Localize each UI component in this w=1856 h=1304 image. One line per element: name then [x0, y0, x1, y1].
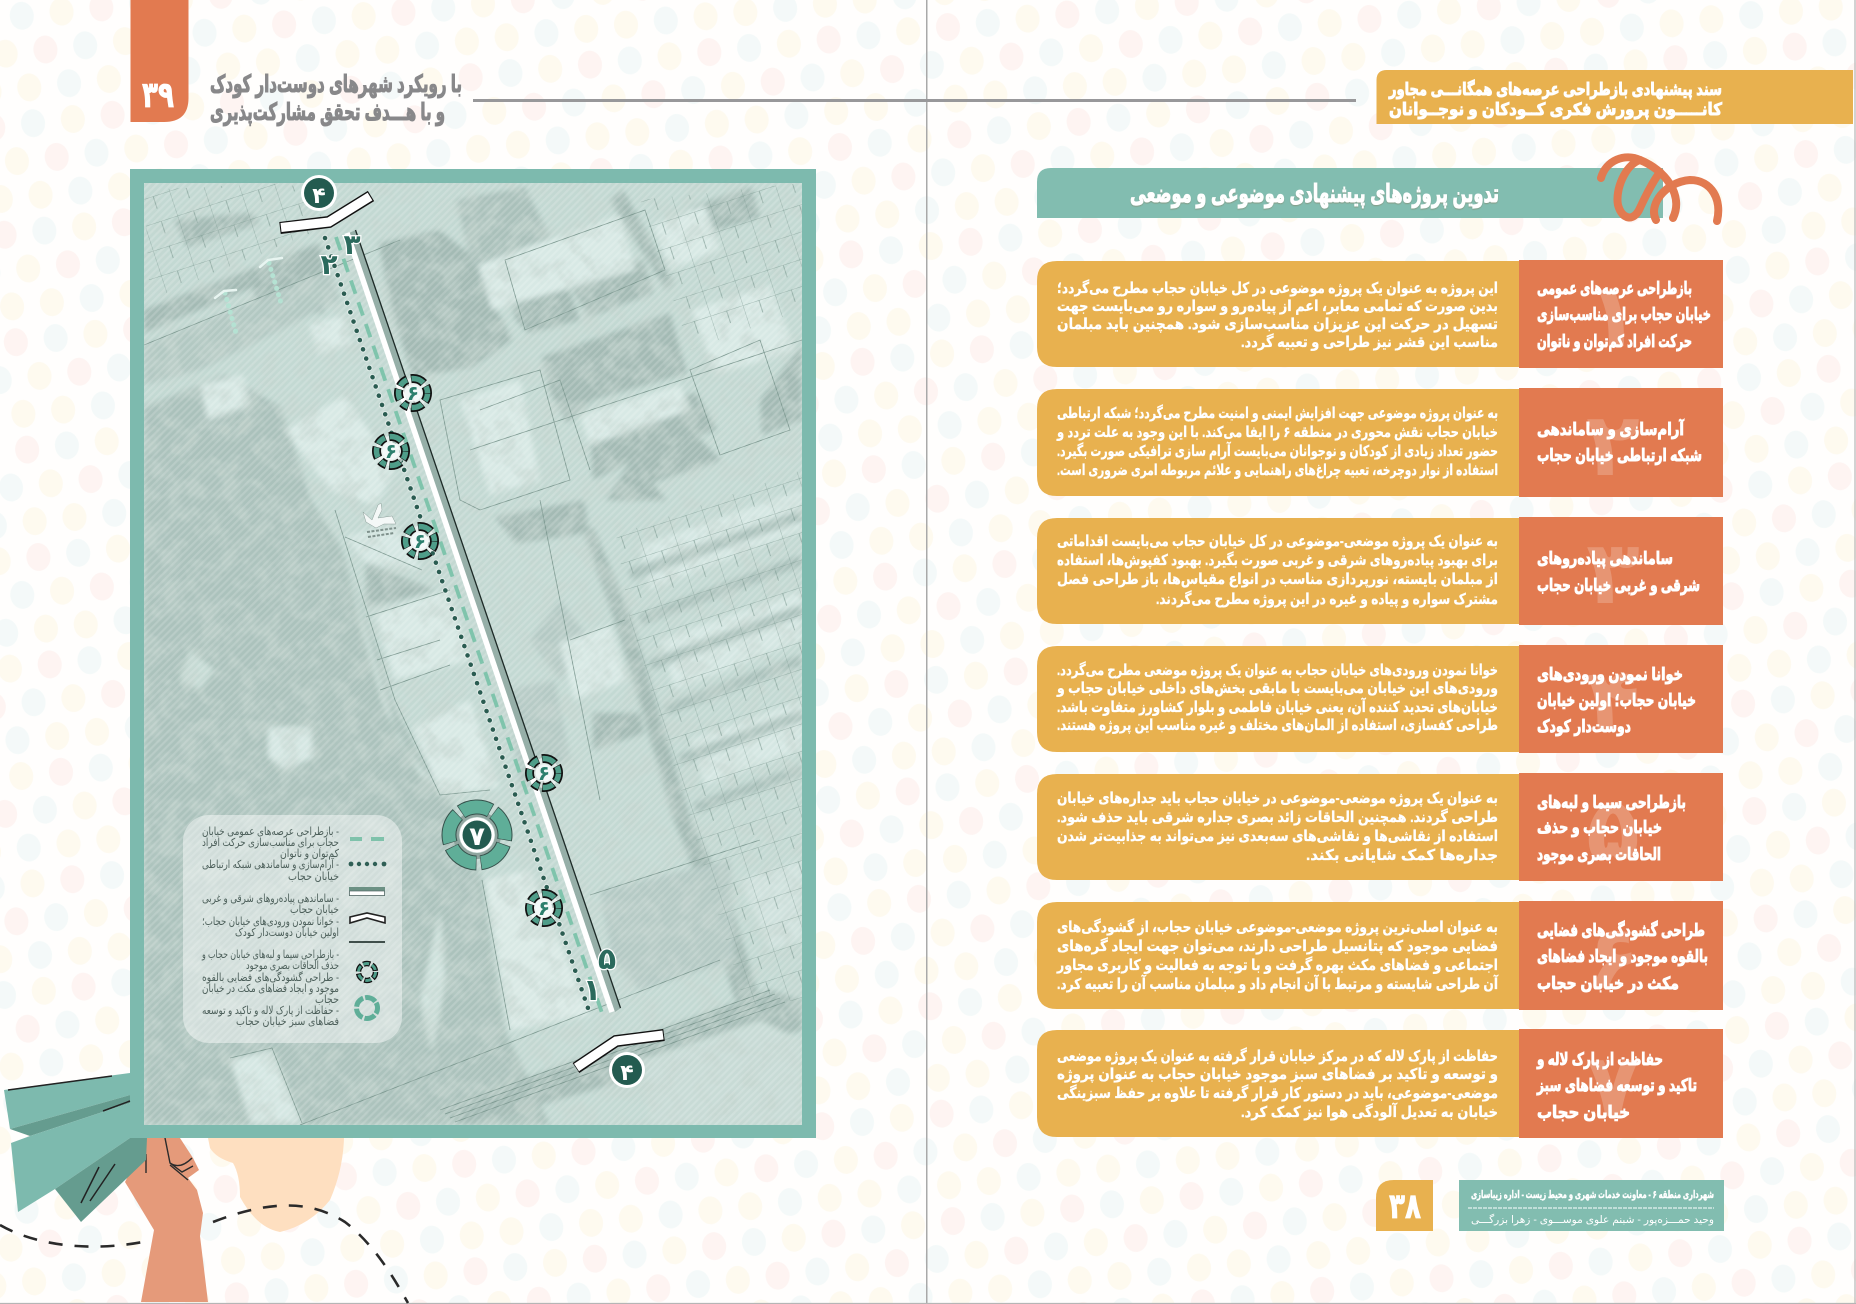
legend symbol: small ring — [358, 964, 376, 980]
right page number box — [1376, 1180, 1433, 1231]
map: marker 4 top — [301, 175, 337, 211]
card 5 title: بازطراحی سیما و لبه‌های — [1537, 793, 1686, 813]
legend symbol: sidewalk band — [349, 887, 385, 896]
map: light blocks — [310, 317, 351, 352]
legend symbol: large ring — [353, 994, 381, 1022]
legend text: فضاهای سبز خیابان حجاب — [236, 1016, 339, 1028]
card 4 description: خیابان‌های تحدید کننده آن، یعنی خیابان فاطمی و بلوار کشاورز متفاوت باشد. — [1057, 698, 1498, 716]
card 6 description: فضایی موجود که پتانسیل طراحی دارند، می‌توان جهت ایجاد گره‌های — [1057, 937, 1498, 956]
map: open-space node 6a — [398, 378, 428, 408]
card 3 description: به عنوان یک پروژه موضعی-موضوعی در کل خیابان حجاب می‌بایست اقداماتی — [1057, 533, 1498, 551]
footer credits box — [1459, 1180, 1724, 1231]
map: open-space node 6d: ۶ — [538, 763, 550, 785]
card 3 description — [1057, 533, 1498, 609]
legend text: - بازطراحی سیما و لبه‌های خیابان حجاب و — [201, 949, 339, 961]
card 3 description: مشترک سواره و پیاده و غیره در این پروژه مطرح می‌گردند. — [1156, 590, 1498, 609]
horizontal header rule — [473, 99, 1356, 102]
card 3 — [1037, 517, 1723, 625]
map: marker 4 bottom — [609, 1052, 645, 1088]
legend text: حذف الحاقات بصری موجود — [246, 960, 339, 972]
top right gold banner: سند پیشنهادی بازطراحی عرصه‌های همگانـــی مجاور — [1388, 79, 1722, 100]
card 3 title: شرقی و غربی خیابان حجاب — [1537, 576, 1700, 596]
card 7 title: حفاظت از پارک لاله و — [1536, 1050, 1663, 1070]
left page heading: با رویکرد شهرهای دوست‌دار کودک — [210, 71, 462, 98]
left page heading — [210, 71, 462, 126]
illustration: hand — [125, 1138, 208, 1302]
card 1 description — [1057, 279, 1498, 351]
card 7 title — [1536, 1050, 1697, 1122]
card 2 description: به عنوان پروژه موضوعی جهت افزایش ایمنی و امنیت مطرح می‌گردد؛ شبکه ارتباطی — [1057, 404, 1498, 423]
card 6 title — [1537, 920, 1708, 993]
map: open-space node 6e: ۶ — [538, 898, 550, 920]
top right gold banner — [1376, 70, 1853, 124]
illustration: dashed flight path — [0, 1206, 408, 1303]
card 6 description: آن طراحی شایسته و مرتبط با آن انجام داد و مبلمان مناسب آن را تعبیه کرد. — [1057, 975, 1499, 993]
card 4 title: خوانا نمودن ورودی‌های — [1537, 665, 1683, 685]
map: central strip — [495, 500, 589, 543]
card 1 description: مناسب این قشر نیز طراحی و تعبیه گردد. — [1241, 333, 1498, 351]
card 6 title: بالقوه موجود و ایجاد فضاهای — [1537, 947, 1708, 967]
legend symbol: black line — [349, 941, 385, 943]
map: open-space node 6b: ۶ — [385, 441, 397, 463]
card 7: ۷ — [1586, 1036, 1640, 1135]
card 1 description: این پروژه به عنوان یک پروژه موضوعی در کل خیابان حجاب مطرح می‌گردد؛ — [1057, 279, 1498, 298]
card 1 title: خیابان حجاب برای مناسب‌سازی — [1537, 305, 1711, 325]
map: open-space node 6b — [376, 436, 406, 466]
right page number box: ۳۸ — [1389, 1187, 1421, 1226]
map: open-space node 6c: ۶ — [414, 531, 426, 553]
card 5 description: جداره‌ها کمک شایانی بکند. — [1306, 847, 1498, 864]
legend text: - ساماندهی پیاده‌روهای شرقی و غربی — [202, 893, 339, 905]
map: aerial base — [144, 183, 802, 1125]
card 7 — [1037, 1029, 1723, 1138]
card 5 title — [1537, 793, 1686, 865]
card 1 title — [1537, 279, 1711, 352]
legend text: موجود و ایجاد فضاهای مکث در خیابان — [202, 983, 339, 995]
card 7 description: حفاظت از پارک لاله که در مرکز خیابان قرار گرفته به عنوان یک پروژه موضعی — [1057, 1047, 1498, 1066]
legend text — [201, 826, 340, 1028]
map: open-space node 6c — [405, 526, 435, 556]
map: sidewalk band — [349, 230, 621, 1012]
map: open-space node 6e — [529, 893, 559, 923]
left page heading: و با هـــدف تحقق مشارکت‌پذیری — [210, 99, 445, 126]
left page number tab — [130, 0, 188, 122]
map: teal dashed route 1 — [336, 237, 602, 1013]
card 4 description: خوانا نمودن ورودی‌های خیابان حجاب به عنوان یک پروژه موضعی مطرح می‌گردد. — [1057, 661, 1498, 680]
map: labels on routes: ۲ — [320, 249, 338, 280]
map: bottom entrance chevron — [576, 1035, 664, 1068]
map: park node 7 — [438, 796, 516, 874]
card 7 title: خیابان حجاب — [1537, 1103, 1630, 1122]
card 6 title: طراحی گشودگی‌های فضایی — [1537, 920, 1705, 941]
card 5 title: الحاقات بصری موجود — [1537, 845, 1661, 865]
card 2: ۲ — [1586, 395, 1640, 494]
card 3 description: برای بهبود پیاده‌روهای شرقی و غربی صورت بگیرد. بهبود کفپوش‌ها، استفاده — [1057, 551, 1498, 570]
illustration: face shape — [208, 1138, 344, 1232]
map: labels on routes: ۳ — [343, 229, 361, 260]
legend text: حجاب — [315, 994, 339, 1006]
card 2 — [1037, 388, 1723, 497]
card 4 description: طراحی کفسازی، استفاده از المان‌های مختلف و غیره مناسب این پروژه هستند. — [1057, 717, 1498, 735]
map: east black edge line — [356, 230, 620, 1008]
map: park node 7: ۷ — [469, 821, 485, 851]
section title bar: تدوین پروژه‌های پیشنهادی موضوعی و موضعی — [1130, 180, 1499, 209]
map: white sidewalk strip — [347, 233, 612, 1012]
map: open-space node 6a: ۶ — [407, 383, 419, 405]
map: west park mid-tone — [144, 440, 550, 1125]
card 4 — [1037, 645, 1723, 753]
card 6: ۶ — [1586, 908, 1640, 1007]
map: marker 4 top: ۴ — [312, 183, 326, 208]
card 7 description — [1057, 1047, 1498, 1121]
legend text: - آرام‌سازی و ساماندهی شبکه ارتباطی — [202, 857, 339, 871]
legend text: - بازطراحی عرصه‌های عمومی خیابان — [202, 826, 339, 838]
legend symbol: dashed line — [350, 837, 384, 841]
card 5 description — [1057, 790, 1498, 864]
map: dotted route 2 — [325, 238, 590, 1014]
card 6 description: به عنوان اصلی‌ترین پروژه موضعی-موضوعی خیابان حجاب، از گشودگی‌های — [1057, 918, 1498, 937]
card 1 description: تسهیل در حرکت این عزیزان مناسب‌سازی شود. همچنین باید مبلمان — [1057, 316, 1498, 334]
card 2 title: آرام‌سازی و ساماندهی — [1537, 418, 1685, 440]
card 1 title: حرکت افراد کم‌توان و ناتوان — [1537, 332, 1692, 352]
top right gold banner: کانـــــون پرورش فکری کــودکان و نوجــوانان — [1389, 100, 1722, 120]
card 3 title — [1537, 549, 1700, 596]
map: south-east — [631, 913, 713, 980]
card 6 description: اجتماعی و فضاهای مکث بهره گرفت و با توجه به فعالیت و کاربری مجاور — [1056, 956, 1498, 974]
footer credits box: شهرداری منطقه ۶ - معاونت خدمات شهری و محیط زیست - اداره زیباسازی — [1471, 1189, 1714, 1201]
left page number tab: ۳۹ — [142, 74, 174, 115]
card 2 title — [1537, 418, 1702, 465]
legend text: خیابان حجاب — [288, 871, 339, 883]
card 5: ۵ — [1586, 779, 1640, 878]
card 7 title: تاکید و توسعه فضاهای سبز — [1536, 1076, 1697, 1096]
map: labels on routes: ۱ — [583, 974, 601, 1007]
card 2 description — [1056, 404, 1498, 480]
page fold divider — [926, 0, 928, 1304]
map: hatching — [144, 183, 802, 1125]
legend text: - خوانا نمودن ورودی‌های خیابان حجاب؛ — [202, 916, 339, 928]
map: mottled texture — [144, 183, 802, 1125]
map: pale dotted markers — [215, 258, 282, 333]
card 5 description: به عنوان یک پروژه موضعی-موضوعی در خیابان حجاب باید جداره‌های خیابان — [1057, 790, 1498, 808]
map frame — [130, 169, 816, 1138]
card 4 description: ورودی‌های این خیابان می‌بایست با مابقی بخش‌های داخلی خیابان حجاب و — [1056, 680, 1498, 697]
icon: orange squiggle — [1601, 157, 1718, 221]
card 5 description: طراحی گردند. همچنین الحاقات زائد بصری جداره شرقی باید حذف شود. — [1057, 808, 1498, 827]
map: labels on routes: ۵ — [598, 943, 616, 976]
card 2 description: حضور تعداد زیادی از کودکان و نوجوانان می‌بایست آرام سازی ترافیکی صورت بگیرد. — [1057, 442, 1498, 460]
card 6 — [1037, 901, 1723, 1010]
map: tonal areas — [144, 187, 802, 1125]
section title bar — [1037, 168, 1663, 218]
card 3: ۳ — [1586, 523, 1640, 622]
card 7 description: خیابان به تعدیل آلودگی هوا نیز کمک کرد. — [1241, 1103, 1498, 1121]
map: parcel grids — [616, 470, 802, 1005]
card 5 description: استفاده از نقاشی‌ها و نقاشی‌های سه‌بعدی نیز می‌تواند به جذابیت‌تر شدن — [1057, 828, 1498, 845]
card 4: ۴ — [1586, 651, 1640, 750]
map: open-space node 6d — [529, 758, 559, 788]
footer credits box: وحید حمـــزه‌پور - شبنم علوی موســـوی - زهرا بزرگـــی — [1471, 1213, 1714, 1226]
card 4 title: خیابان حجاب؛ اولین خیابان — [1537, 691, 1696, 711]
legend symbol: entrance chevron — [350, 913, 385, 923]
legend symbol: dots — [349, 862, 386, 866]
card 2 description: خیابان حجاب نقش محوری در منطقه ۶ را ایفا می‌کند. با این وجود به علت تردد و — [1056, 424, 1498, 441]
map: marker 4 bottom: ۴ — [620, 1060, 634, 1085]
map: thin parcel lines — [144, 210, 802, 1125]
map: top entrance chevron — [280, 196, 371, 228]
map: organisation logo — [363, 503, 396, 537]
legend text: کم‌توان و ناتوان — [280, 848, 340, 860]
card 4 description — [1056, 661, 1498, 735]
card 2 description: استفاده از نوار دوچرخه، تعبیه چراغ‌های راهنمایی و علائم مربوطه امری ضروری است. — [1057, 462, 1498, 480]
card 6 description — [1056, 918, 1499, 993]
card 1 — [1037, 260, 1723, 368]
card 5 title: خیابان حجاب و حذف — [1537, 818, 1662, 838]
card 4 title: دوست‌دار کودک — [1537, 717, 1631, 737]
legend text: اولین خیابان دوست‌دار کودک — [235, 927, 339, 939]
legend text: - طراحی گشودگی‌های فضایی بالقوه — [202, 971, 339, 984]
card 1 description: بدین صورت که تمامی معابر، اعم از پیاده‌رو و سواره رو می‌بایست جهت — [1057, 298, 1498, 316]
card 7 description: و توسعه و تاکید بر فضاهای سبز موجود خیابان حجاب به عنوان پروژه — [1057, 1066, 1498, 1084]
card 1 title: بازطراحی عرصه‌های عمومی — [1537, 279, 1692, 299]
illustration: paper plane — [4, 1073, 147, 1222]
card 3 title: ساماندهی پیاده‌روهای — [1537, 549, 1673, 569]
legend text: خیابان حجاب — [290, 904, 339, 916]
card 3 description: از مبلمان بایسته، نورپردازی مناسب در انواع مقیاس‌ها، باز طراحی فصل — [1057, 571, 1498, 589]
legend text: حجاب برای مناسب‌سازی حرکت افراد — [202, 837, 339, 849]
card 6 title: مکث در خیابان حجاب — [1537, 974, 1679, 993]
legend text: - حفاظت از پارک لاله و تاکید و توسعه — [202, 1005, 339, 1017]
map: house bands east — [630, 515, 802, 808]
map: legend panel — [183, 815, 402, 1043]
map: labels on routes — [320, 229, 616, 1007]
card 2 title: شبکه ارتباطی خیابان حجاب — [1537, 446, 1702, 465]
card 7 description: موضعی-موضوعی، باید در دستور کار قرار گرفته تا علاوه بر حفظ سبزینگی — [1057, 1084, 1498, 1102]
card 1: ۱ — [1586, 266, 1640, 365]
card 5 — [1037, 773, 1723, 881]
card 4 title — [1537, 665, 1696, 737]
